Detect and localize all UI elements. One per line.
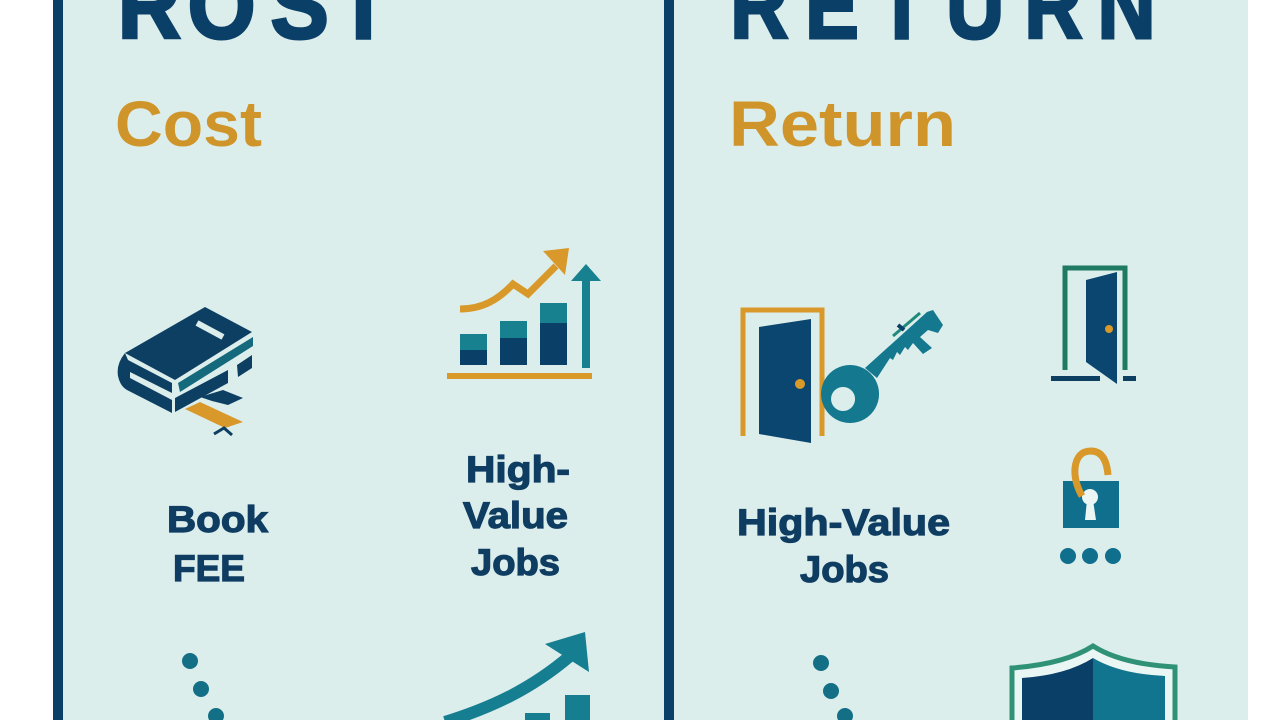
label: High-Value Jobs (left): [463, 449, 570, 583]
icon: three dots: [1060, 548, 1121, 564]
label: High-Value Jobs (left): Jobs: [471, 542, 560, 583]
label: High-Value Jobs (right): High-Value: [737, 502, 950, 543]
label: Book FEE: Book: [167, 499, 268, 540]
label: High-Value Jobs (right): Jobs: [800, 549, 889, 590]
icon: door with key: [743, 310, 943, 443]
icon: bar chart with rising arrows: [447, 248, 601, 379]
icon: open padlock: [1063, 451, 1119, 528]
icon: vertical dots (left): [182, 653, 224, 720]
icon: rising arrow with bars: [445, 632, 590, 720]
icon: book: [118, 307, 253, 435]
icon: shield: [1012, 646, 1175, 720]
label: High-Value Jobs (left): High-: [466, 449, 570, 490]
label: High-Value Jobs (left): Value: [463, 495, 568, 536]
label: Book FEE: FEE: [173, 548, 245, 589]
icon: vertical dots (right): [813, 655, 853, 720]
subheading: Return: Return: [729, 88, 956, 160]
label: Book FEE: [167, 499, 268, 589]
subheading: Cost: Cost: [115, 88, 262, 160]
label: High-Value Jobs (right): [737, 502, 950, 590]
icon: open door (green frame): [1051, 268, 1136, 384]
